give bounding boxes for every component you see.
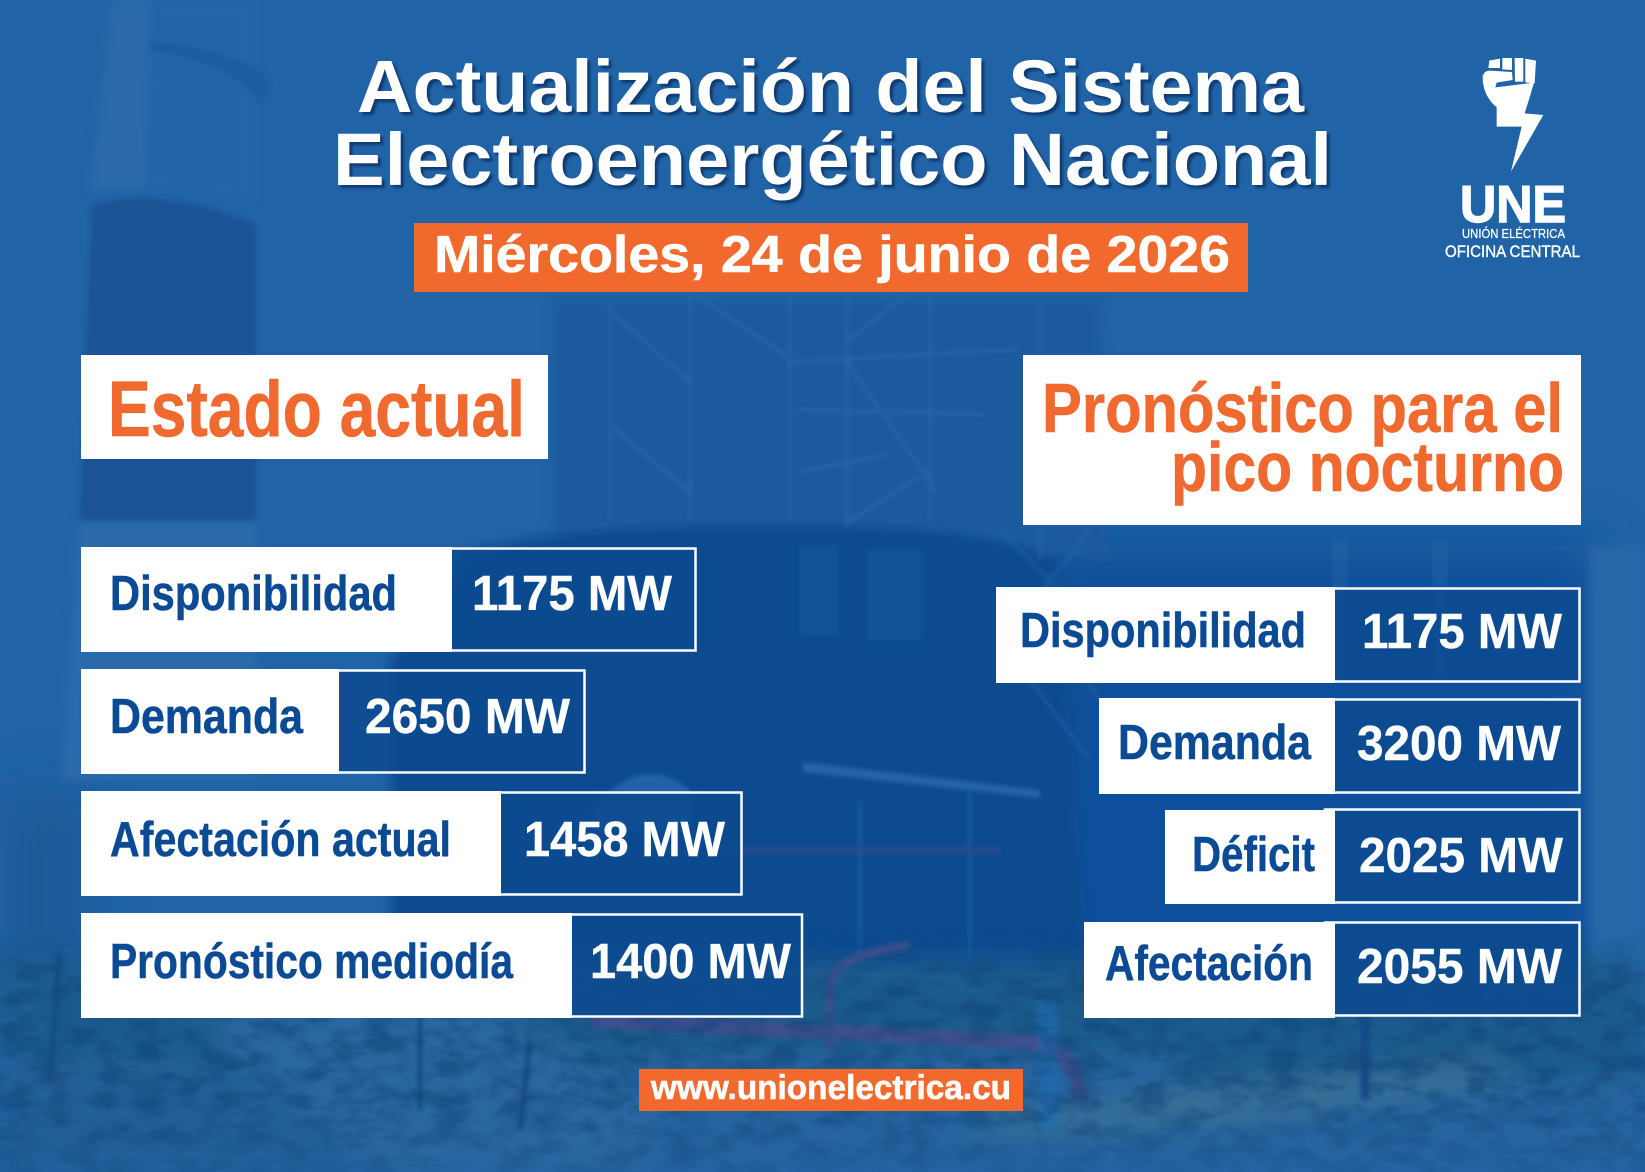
- title: [333, 45, 1332, 201]
- row: Disponibilidad 1175 MW: [81, 547, 696, 652]
- date badge: Miércoles, 24 de junio de 2026: [434, 226, 1230, 284]
- row: Disponibilidad 1175 MW: Disponibilidad: [1020, 604, 1306, 658]
- row: Disponibilidad 1175 MW: 1175 MW: [1362, 605, 1563, 659]
- website badge: www.unionelectrica.cu: [650, 1069, 1011, 1107]
- row: Disponibilidad 1175 MW: 1175 MW: [472, 567, 673, 621]
- logo: UNE: [1445, 58, 1580, 261]
- title: Electroenergético Nacional: [333, 118, 1332, 201]
- row: Afectación 2055 MW: 2055 MW: [1357, 940, 1563, 994]
- row: Disponibilidad 1175 MW: Disponibilidad: [110, 567, 397, 621]
- row: Demanda 2650 MW: Demanda: [110, 690, 304, 744]
- row: Déficit 2025 MW: Déficit: [1192, 828, 1315, 882]
- panel: estado actual rows: [81, 547, 802, 1018]
- icon: fist and lightning bolt: [1483, 58, 1543, 172]
- row: Demanda 2650 MW: [81, 669, 584, 774]
- logo: UNE: UNE: [1460, 176, 1566, 234]
- lower landscape: [0, 960, 1645, 1172]
- row: Pronóstico mediodía 1400 MW: 1400 MW: [590, 935, 792, 989]
- heading: Pronóstico para el pico nocturno: pico nocturno: [1171, 428, 1564, 506]
- row: Afectación 2055 MW: Afectación: [1105, 937, 1313, 991]
- heading: Estado actual: Estado actual: [108, 364, 525, 453]
- row: Afectación actual 1458 MW: 1458 MW: [524, 813, 726, 867]
- heading: Pronóstico para el pico nocturno: Pronóstico para el: [1042, 369, 1563, 447]
- heading: Pronóstico para el pico nocturno: [1023, 355, 1581, 525]
- row: Déficit 2025 MW: [1165, 810, 1580, 904]
- row: Afectación 2055 MW: [1084, 922, 1580, 1018]
- row: Disponibilidad 1175 MW: [996, 587, 1580, 683]
- row: Déficit 2025 MW: 2025 MW: [1359, 829, 1564, 883]
- logo: UNE: OFICINA CENTRAL: [1445, 242, 1580, 261]
- row: Demanda 3200 MW: [1099, 698, 1580, 794]
- row: Pronóstico mediodía 1400 MW: Pronóstico mediodía: [110, 935, 514, 989]
- panel: pronóstico rows: [996, 587, 1580, 1018]
- row: Pronóstico mediodía 1400 MW: [81, 913, 802, 1018]
- scaffolding: [610, 292, 1100, 960]
- row: Afectación actual 1458 MW: [81, 791, 742, 896]
- title: Actualización del Sistema: [357, 45, 1305, 128]
- row: Afectación actual 1458 MW: Afectación actual: [110, 813, 451, 867]
- row: Demanda 3200 MW: 3200 MW: [1357, 717, 1562, 771]
- row: Demanda 3200 MW: Demanda: [1118, 716, 1312, 770]
- logo: UNE: UNIÓN ELÉCTRICA: [1462, 226, 1565, 241]
- row: Demanda 2650 MW: 2650 MW: [365, 690, 571, 744]
